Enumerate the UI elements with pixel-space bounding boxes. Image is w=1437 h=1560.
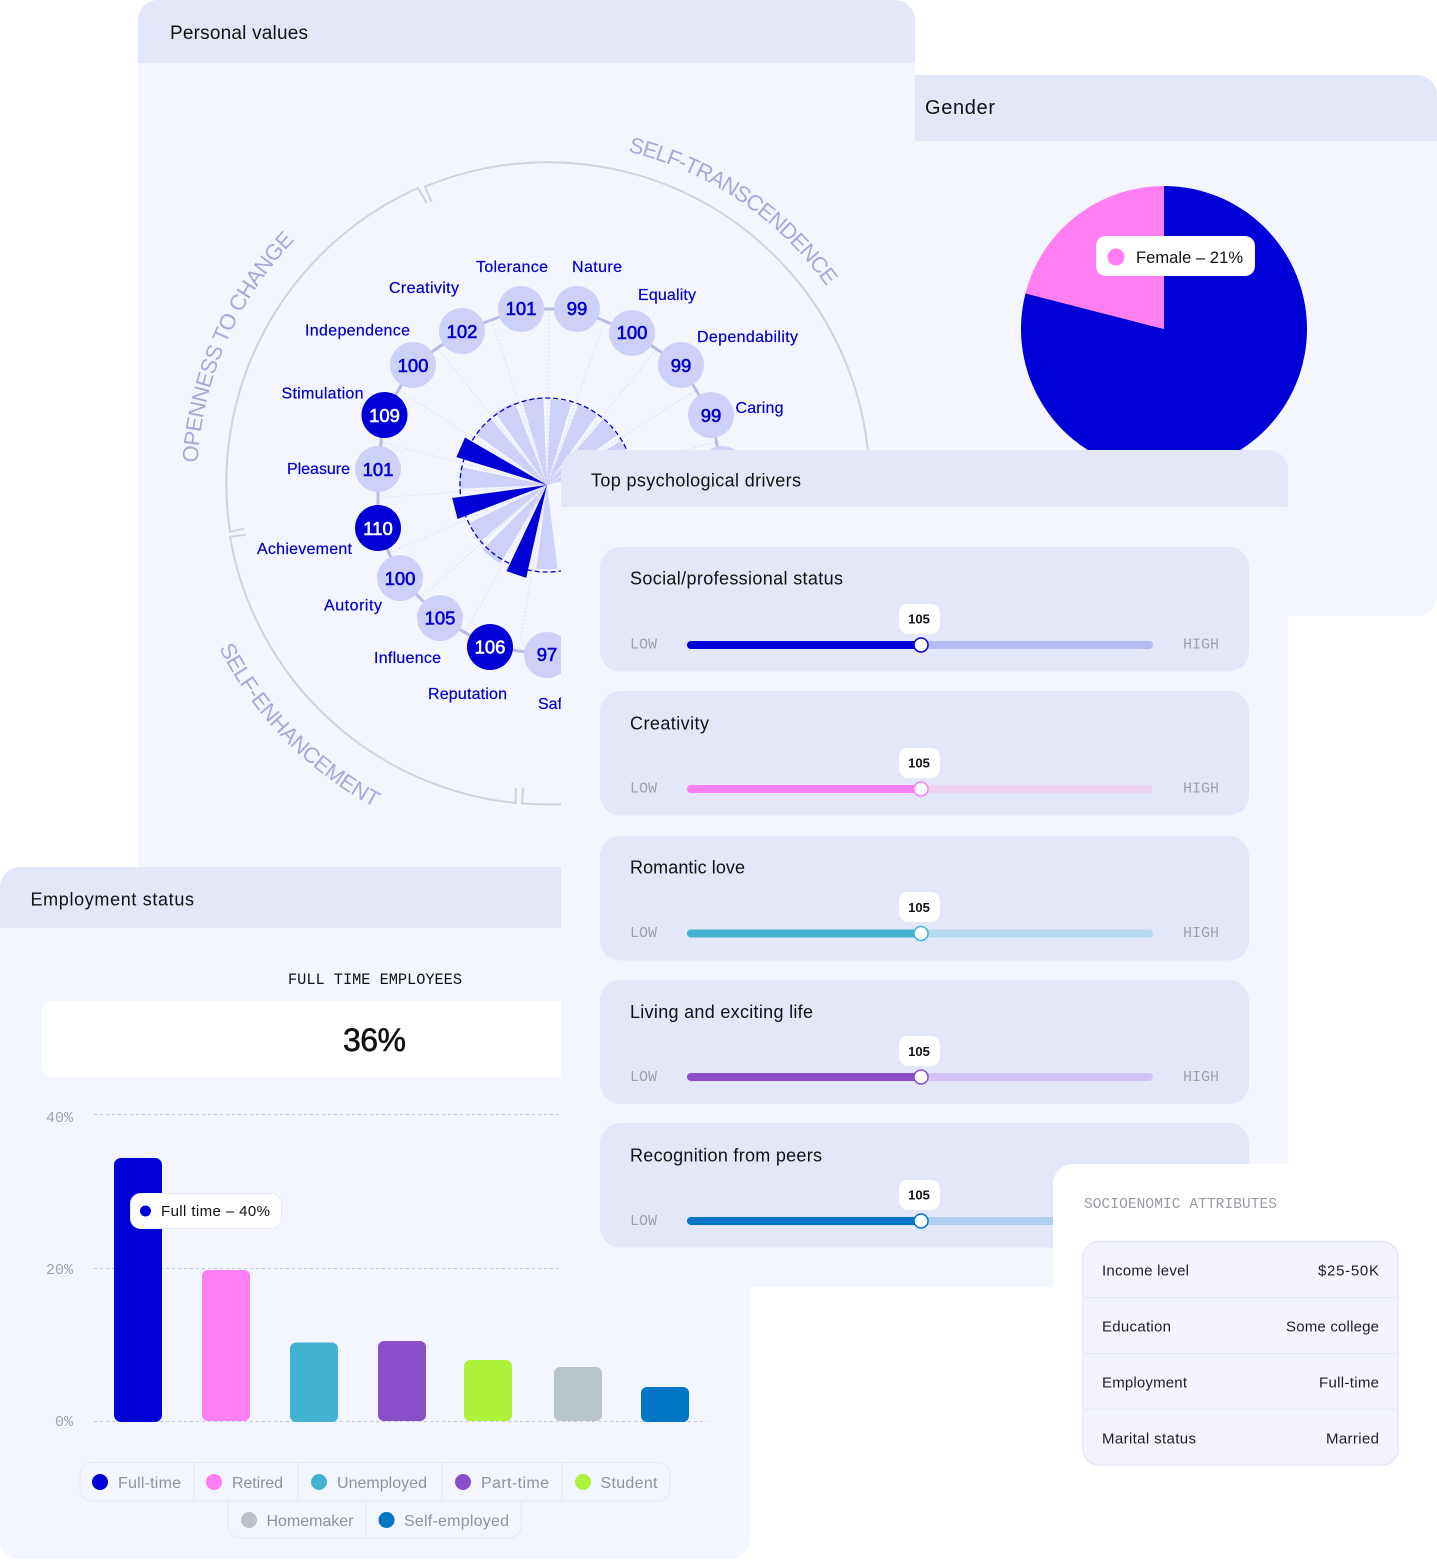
node: nature xyxy=(554,286,600,332)
dashed reference circle xyxy=(460,398,634,572)
driver card: social/professional status: 105 xyxy=(908,612,930,626)
node: independence: 100 xyxy=(398,355,428,376)
value labels xyxy=(257,259,798,713)
curved label: self-enhancement: SELF-ENHANCEMENT xyxy=(221,644,382,805)
driver card: romantic love xyxy=(600,836,1249,960)
chart legend: Unemployed xyxy=(337,1475,427,1492)
driver card: romantic love: 105 xyxy=(908,900,930,915)
attribute table: Some college xyxy=(1286,1318,1379,1336)
driver card: creativity: Creativity xyxy=(630,714,709,734)
node: reputation xyxy=(467,624,513,670)
node: safety: 97 xyxy=(537,644,557,665)
tooltip: female share xyxy=(1096,236,1255,276)
employment panel background xyxy=(0,867,750,1559)
employment header bar xyxy=(0,867,750,928)
driver card: recognition from peers xyxy=(600,1123,1249,1248)
drivers heading: Top psychological drivers xyxy=(591,470,801,490)
node connector line xyxy=(378,309,722,655)
panel: top psychological drivers xyxy=(561,450,1288,1287)
node: creativity: 102 xyxy=(447,321,477,342)
node: creativity xyxy=(439,308,485,354)
personal values background xyxy=(138,0,915,900)
attribute table: Employment xyxy=(1102,1374,1188,1392)
tooltip: full time share: Full time – 40% xyxy=(161,1203,270,1220)
chart legend: Full-time xyxy=(118,1475,181,1492)
value labels: Caring xyxy=(736,400,784,417)
node: autority xyxy=(377,555,423,601)
node: influence xyxy=(417,595,463,641)
tooltip: full time share xyxy=(130,1194,282,1228)
personal values heading: Personal values xyxy=(170,23,308,44)
attribute table: Income level xyxy=(1102,1262,1189,1280)
driver card: creativity: 105 xyxy=(908,756,930,770)
driver card: living and exciting life xyxy=(600,980,1249,1104)
node: tolerance: 101 xyxy=(506,298,536,319)
bar chart axis and gridlines: 0% xyxy=(55,1414,74,1431)
node: partly hidden xyxy=(699,446,745,492)
socioeconomic heading: SOCIOENOMIC ATTRIBUTES xyxy=(1084,1197,1277,1213)
node: dependability xyxy=(658,342,704,388)
driver card: social/professional status: Social/professional status xyxy=(630,568,843,588)
chart legend: Part-time xyxy=(481,1475,549,1492)
node: pleasure: 101 xyxy=(363,459,393,480)
chart legend: Retired xyxy=(232,1475,283,1492)
gender panel background xyxy=(880,75,1437,616)
node: safety xyxy=(524,632,570,678)
node: caring: 99 xyxy=(701,405,721,426)
node: achievement xyxy=(355,505,401,551)
value labels: Nature xyxy=(572,259,622,276)
chart legend: Student xyxy=(600,1475,658,1492)
node: tolerance xyxy=(498,286,544,332)
chart legend xyxy=(80,1462,670,1538)
chart legend: Self-employed xyxy=(404,1513,509,1530)
gender heading: Gender xyxy=(925,97,995,119)
driver card: romantic love: Romantic love xyxy=(630,858,745,878)
bar chart bars xyxy=(114,1158,689,1422)
attribute table: Full-time xyxy=(1319,1374,1379,1392)
node: autority: 100 xyxy=(385,568,415,589)
curved label: openness to change: OPENNESS TO CHANGE xyxy=(182,230,294,462)
curved label: self-transcendence: SELF-TRANSCENDENCE xyxy=(630,138,838,286)
radial wedges xyxy=(459,397,630,569)
panel: employment status xyxy=(0,867,750,1559)
value labels: Influence xyxy=(374,650,441,667)
pie chart xyxy=(1021,186,1307,472)
employment heading: Employment status xyxy=(30,890,194,910)
driver card: living and exciting life: HIGH xyxy=(1183,1069,1219,1086)
node: independence xyxy=(390,342,436,388)
driver card: recognition from peers: 105 xyxy=(908,1188,930,1202)
radial spokes xyxy=(378,309,716,651)
driver card: romantic love: LOW xyxy=(630,925,657,942)
gender header bar xyxy=(880,75,1437,141)
node: achievement: 110 xyxy=(363,518,393,539)
driver card: living and exciting life: LOW xyxy=(630,1069,657,1086)
node: dependability: 99 xyxy=(671,355,691,376)
driver card: living and exciting life: Living and exciting life xyxy=(630,1002,813,1022)
attribute table: $25-50K xyxy=(1318,1262,1379,1280)
driver card: creativity xyxy=(600,691,1249,816)
driver card: social/professional status xyxy=(600,547,1249,672)
value labels: Achievement xyxy=(257,541,353,558)
value labels: Dependability xyxy=(697,329,798,346)
socioeconomic panel background xyxy=(1053,1164,1437,1500)
bar chart axis and gridlines: 20% xyxy=(46,1262,74,1279)
full time employees label: FULL TIME EMPLOYEES xyxy=(288,971,462,989)
value labels: Reputation xyxy=(428,686,507,703)
drivers header bar xyxy=(561,450,1288,507)
driver card: creativity: LOW xyxy=(630,780,657,798)
attribute table: Married xyxy=(1326,1430,1379,1448)
value labels: Tolerance xyxy=(476,259,548,276)
attribute table xyxy=(1083,1242,1398,1465)
node: pleasure xyxy=(355,446,401,492)
node: equality: 100 xyxy=(617,322,647,343)
node: reputation: 106 xyxy=(475,636,505,658)
driver card: creativity: HIGH xyxy=(1183,780,1219,798)
driver card: recognition from peers: Recognition from peers xyxy=(630,1146,822,1166)
stat card: 36%: 36% xyxy=(343,1022,406,1058)
drivers panel background xyxy=(561,450,1288,1287)
panel: socioeconomic attributes xyxy=(1053,1164,1437,1500)
driver card: living and exciting life: 105 xyxy=(908,1044,930,1059)
value labels: Creativity xyxy=(389,280,459,297)
node: caring xyxy=(688,392,734,438)
node: equality xyxy=(609,310,655,356)
stat card: 36% xyxy=(41,1001,709,1077)
driver card: romantic love: HIGH xyxy=(1183,925,1219,942)
chart legend: Homemaker xyxy=(266,1513,354,1530)
node: stimulation xyxy=(362,392,408,438)
bar chart axis and gridlines xyxy=(46,1110,707,1431)
node: nature: 99 xyxy=(567,298,587,319)
personal values header bar xyxy=(138,0,915,63)
node: stimulation: 109 xyxy=(369,405,400,426)
panel: gender xyxy=(880,75,1437,616)
driver card: social/professional status: LOW xyxy=(630,636,657,654)
panel: personal values xyxy=(138,0,915,867)
node: influence: 105 xyxy=(425,608,455,628)
highlighted wedges xyxy=(452,437,557,578)
driver card: recognition from peers: LOW xyxy=(630,1213,657,1230)
outer ring arcs xyxy=(226,162,870,804)
attribute table: Education xyxy=(1102,1318,1171,1336)
value labels: Pleasure xyxy=(287,461,350,478)
value labels: Stimulation xyxy=(282,386,364,402)
bar chart axis and gridlines: 40% xyxy=(46,1110,74,1127)
value labels: Safety xyxy=(538,696,583,713)
value labels: Independence xyxy=(305,322,410,340)
attribute table: Marital status xyxy=(1102,1430,1196,1448)
value labels: Autority xyxy=(324,598,382,614)
value labels: Equality xyxy=(638,287,696,304)
driver card: social/professional status: HIGH xyxy=(1183,636,1219,654)
tooltip: female share: Female – 21% xyxy=(1136,249,1243,267)
